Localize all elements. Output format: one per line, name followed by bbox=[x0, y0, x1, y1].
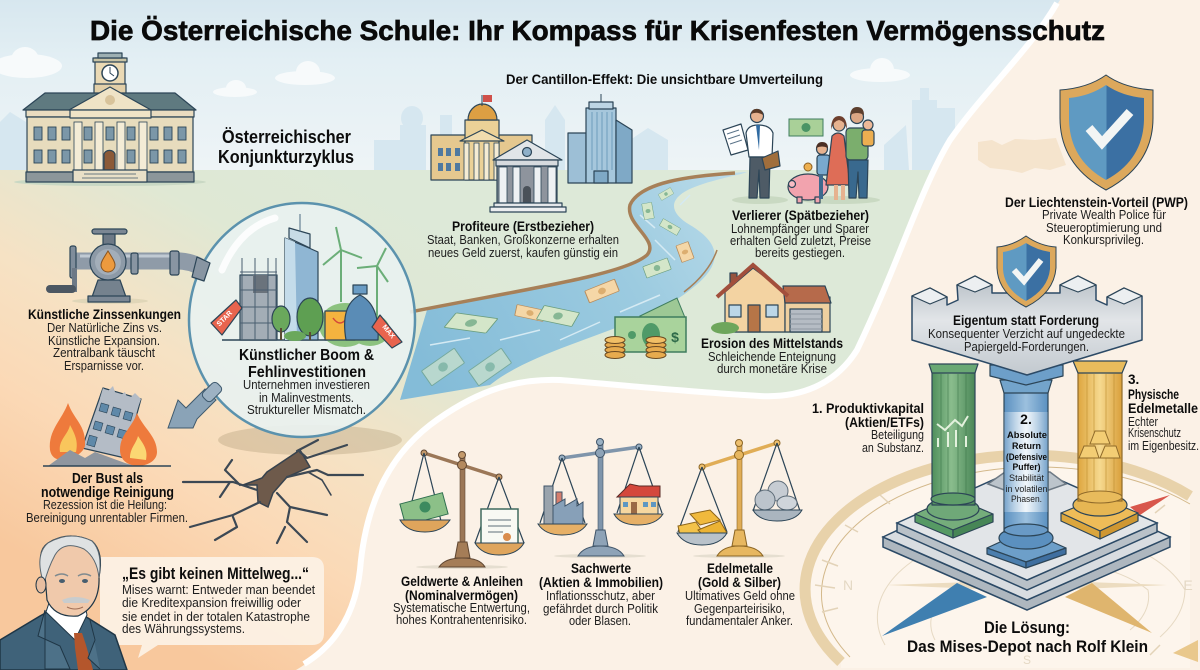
panel: Liechtenstein advantage bbox=[978, 75, 1188, 247]
text block: Geldwerte: hohes Kontrahentenrisiko. bbox=[396, 613, 527, 627]
text block: Künstliche Zinssenkungen: Zentralbank täuscht bbox=[53, 346, 155, 360]
text block: quote: des Währungssystems. bbox=[122, 622, 245, 636]
illustration: compass rose bbox=[805, 455, 1198, 668]
icon: malinvestment city: MAX bbox=[380, 324, 396, 340]
panel: Cantillon effect bbox=[427, 72, 880, 376]
text block: boom: Struktureller Mismatch. bbox=[247, 403, 366, 417]
icon: cash pile and coins bbox=[605, 298, 686, 358]
label: pillar 1: an Substanz. bbox=[862, 441, 924, 455]
text block: bust: notwendige Reinigung bbox=[41, 484, 174, 501]
text block: Künstliche Zinssenkungen: Der Natürliche Zins vs. bbox=[47, 321, 162, 335]
label: pillar 1: (Aktien/ETFs) bbox=[845, 415, 924, 430]
text block: Erosion des Mittelstands: durch monetäre Krise bbox=[717, 362, 827, 376]
label: pillar 3: Echter bbox=[1128, 415, 1158, 429]
heading: Cantillon effect: Der Cantillon-Effekt: Die unsichtbare Umverteilung bbox=[506, 72, 823, 88]
label: pillar 2: Return bbox=[1012, 441, 1041, 452]
illustration: compass rose: S bbox=[1023, 653, 1031, 667]
text block: Künstliche Zinssenkungen: Künstliche Zinssenkungen bbox=[28, 307, 181, 323]
text block: Eigentum statt Forderung bbox=[928, 313, 1125, 354]
icon: government, bank and office buildings bbox=[431, 94, 632, 212]
text block: boom: Unternehmen investieren bbox=[243, 378, 370, 392]
text block: boom bbox=[239, 347, 374, 417]
pillar: Absolute Return bbox=[987, 365, 1066, 568]
icon: scale with gold and silver bbox=[677, 440, 802, 558]
text block: Profiteure bbox=[427, 219, 619, 260]
icon: family house bbox=[711, 265, 831, 334]
text block: quote bbox=[122, 564, 315, 636]
text block: Verlierer: Lohnempfänger und Sparer bbox=[731, 222, 869, 236]
text block: Liechtenstein: Konkursprivileg. bbox=[1063, 233, 1144, 247]
text block: Verlierer bbox=[730, 208, 871, 260]
illustration: compass rose: E bbox=[1183, 577, 1193, 593]
icon: malinvestment city bbox=[211, 214, 402, 348]
text block: Edelmetalle bbox=[685, 561, 795, 628]
panel: Mises quote bbox=[0, 536, 324, 670]
icon: interest rate valve pipe bbox=[46, 229, 210, 304]
speech bubble bbox=[100, 557, 324, 658]
icon: scale with cash and bond certificate bbox=[400, 450, 524, 569]
arrow: boom to bust bbox=[168, 381, 223, 428]
label: pillar 2: Puffer) bbox=[1012, 462, 1040, 473]
label: pillar 2: in volatilen bbox=[1006, 484, 1048, 494]
heading: Konjunkturzyklus: Österreichischer bbox=[222, 127, 351, 147]
text block: Sachwerte: oder Blasen. bbox=[569, 614, 631, 628]
label: pillar 2: (Defensive bbox=[1006, 452, 1047, 463]
label: pillar 1: Beteiligung bbox=[871, 428, 924, 442]
heading: Die Lösung: Das Mises-Depot nach Rolf Klein bbox=[907, 637, 1148, 656]
icon: small shield with check bbox=[997, 236, 1056, 307]
icon: ground crack bbox=[183, 440, 363, 543]
text block: Profiteure: neues Geld zuerst, kaufen günstig ein bbox=[428, 246, 618, 260]
label: pillar 1 bbox=[812, 401, 924, 455]
text block: Künstliche Zinssenkungen bbox=[28, 307, 181, 373]
background: ground gradient from green to peach bbox=[0, 170, 1200, 670]
text block: boom: in Malinvestments. bbox=[259, 391, 354, 405]
icon: town hall bbox=[14, 53, 206, 186]
heading: Konjunkturzyklus: Konjunkturzyklus bbox=[218, 147, 354, 167]
text block: Geldwerte: Geldwerte & Anleihen bbox=[401, 574, 523, 590]
text block: quote: „Es gibt keinen Mittelweg...“ bbox=[122, 564, 309, 583]
text block: quote: sie endet in der totalen Katastrophe bbox=[122, 610, 310, 624]
text block: Sachwerte: Inflationsschutz, aber bbox=[546, 589, 655, 603]
label: pillar 2: 2. bbox=[1020, 411, 1032, 427]
heading: Die Lösung: Die Lösung: bbox=[984, 618, 1070, 637]
text block: Eigentum statt Forderung: Konsequenter Verzicht auf ungedeckte bbox=[928, 327, 1125, 341]
capital: crenellated top bbox=[912, 276, 1142, 375]
icon: cash pile and coins: $ bbox=[671, 329, 679, 345]
text block: Liechtenstein: Private Wealth Police für bbox=[1042, 208, 1166, 222]
background: clouds bbox=[0, 47, 910, 97]
icon: collapsing building in flames bbox=[43, 386, 171, 466]
text block: bust bbox=[26, 470, 188, 525]
icon: scale with factory and house bbox=[538, 438, 663, 558]
pillar: Produktivkapital bbox=[915, 364, 993, 538]
text block: Edelmetalle: (Gold & Silber) bbox=[698, 575, 781, 591]
panel: solution background bbox=[296, 0, 1200, 670]
label: pillar 3 bbox=[1128, 372, 1199, 453]
label: pillar 1: 1. Produktivkapital bbox=[812, 401, 924, 416]
text block: Edelmetalle: Ultimatives Geld ohne bbox=[685, 589, 795, 603]
text block: Edelmetalle: Gegenparteirisiko, bbox=[694, 602, 785, 616]
shadow under the bubble bbox=[218, 425, 402, 455]
text block: Edelmetalle: fundamentaler Anker. bbox=[686, 614, 793, 628]
river of money bbox=[400, 172, 747, 400]
text block: Künstliche Zinssenkungen: Ersparnisse vor. bbox=[64, 359, 144, 373]
text block: quote: die Kreditexpansion freiwillig oder bbox=[122, 596, 301, 610]
text block: bust: Der Bust als bbox=[72, 470, 143, 487]
text block: Eigentum statt Forderung: Papiergeld-Forderungen. bbox=[964, 340, 1089, 354]
text block: Künstliche Zinssenkungen: Künstliche Expansion. bbox=[48, 334, 160, 348]
text block: Liechtenstein: Steueroptimierung und bbox=[1046, 221, 1162, 235]
label: pillar 2: Stabilität bbox=[1009, 473, 1044, 483]
text block: Erosion des Mittelstands: Schleichende Enteignung bbox=[708, 350, 836, 364]
text block: Geldwerte: (Nominalvermögen) bbox=[405, 588, 518, 604]
label: pillar 3: Physische bbox=[1128, 387, 1179, 402]
text block: Verlierer: Verlierer (Spätbezieher) bbox=[732, 208, 869, 224]
boundary curve bbox=[304, 3, 1057, 664]
text block: boom: Fehlinvestitionen bbox=[248, 364, 366, 381]
label: pillar 2 bbox=[1006, 411, 1048, 504]
text block: Sachwerte bbox=[539, 561, 663, 628]
background: sky bbox=[0, 0, 1200, 172]
icon: employee with contract and family with piggy bank bbox=[723, 107, 880, 204]
text block: boom: Künstlicher Boom & bbox=[239, 347, 374, 364]
illustration: compass rose: N bbox=[843, 577, 853, 593]
icon: malinvestment city: STAR bbox=[216, 310, 234, 328]
text block: Sachwerte: Sachwerte bbox=[571, 561, 631, 577]
label: pillar 3: 3. bbox=[1128, 372, 1139, 387]
label: pillar 2: Phasen. bbox=[1011, 494, 1042, 504]
portrait: Ludwig von Mises bbox=[0, 536, 127, 670]
icon: large shield with check bbox=[1060, 75, 1153, 190]
text block: Geldwerte bbox=[393, 574, 530, 627]
label: pillar 3: Krisenschutz bbox=[1128, 426, 1181, 440]
panel: asset class scales bbox=[393, 438, 802, 628]
panel: Mises depot solution bbox=[805, 236, 1199, 668]
text block: Verlierer: bereits gestiegen. bbox=[755, 246, 845, 260]
text block: Verlierer: erhalten Geld zuletzt, Preise bbox=[730, 234, 871, 248]
text block: Sachwerte: gefährdet durch Politik bbox=[543, 602, 659, 616]
panel: boom bubble bbox=[189, 203, 415, 437]
text block: Eigentum statt Forderung: Eigentum statt Forderung bbox=[953, 313, 1099, 329]
text block: bust: Rezession ist die Heilung: bbox=[43, 498, 167, 512]
text block: Profiteure: Staat, Banken, Großkonzerne erhalten bbox=[427, 233, 619, 247]
text block: quote: Mises warnt: Entweder man beendet bbox=[122, 583, 315, 597]
icon: map of Liechtenstein and Austria bbox=[978, 138, 1066, 173]
title: Die Österreichische Schule: Ihr Kompass für Krisenfesten Vermögensschutz bbox=[90, 15, 1105, 46]
label: pillar 2: Absolute bbox=[1007, 430, 1047, 441]
text block: Profiteure: Profiteure (Erstbezieher) bbox=[452, 219, 594, 235]
text block: Erosion des Mittelstands bbox=[701, 336, 843, 376]
text block: Geldwerte: Systematische Entwertung, bbox=[393, 601, 530, 615]
heading: Die Lösung bbox=[907, 618, 1148, 656]
pillar: Physische Edelmetalle bbox=[1061, 361, 1138, 539]
text block: Erosion des Mittelstands: Erosion des Mittelstands bbox=[701, 336, 843, 352]
text block: Edelmetalle: Edelmetalle bbox=[707, 561, 773, 577]
panel: Austrian business cycle bbox=[0, 53, 415, 670]
background: distant skyline bbox=[0, 88, 955, 170]
text block: Liechtenstein bbox=[1005, 195, 1188, 247]
illustration: stepped platform bbox=[883, 465, 1170, 610]
text block: Sachwerte: (Aktien & Immobilien) bbox=[539, 575, 663, 591]
heading: Konjunkturzyklus bbox=[218, 127, 354, 167]
text block: bust: Bereinigung unrentabler Firmen. bbox=[26, 511, 188, 525]
